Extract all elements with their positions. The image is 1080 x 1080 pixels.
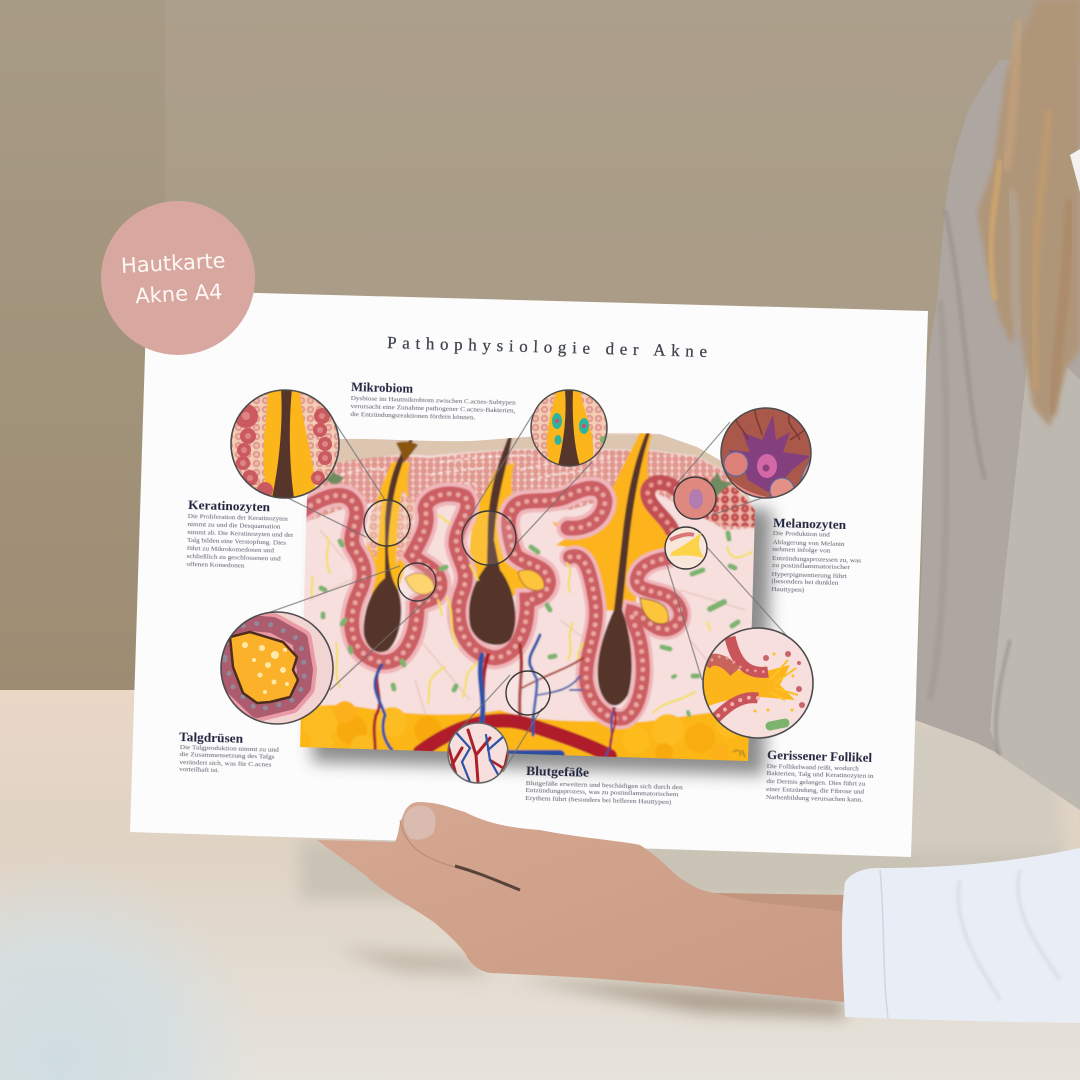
title: Pathophysiologie der Akne [387,333,707,361]
text block: Mikrobiom: Dysbiose im Hautmikrobiom zwischen C.acnes-Subtypen [351,396,516,407]
text block: Blutgefäße [525,763,683,806]
magnifier: melanocytes [720,407,812,499]
magnifier: sebaceous gland [221,612,333,724]
badge: Hautkarte Akne A4: Hautkarte [120,249,226,278]
white shirt sleeve [842,848,1080,1023]
thumbnail [404,806,436,840]
text block: Melanozyten: Die Produktion und [773,531,830,539]
stratum corneum [336,434,752,506]
text block: Talgdrüsen: vorteilhaft ist. [179,766,220,774]
text block: Melanozyten: Hauttypen) [771,586,804,594]
background: table [0,690,1080,1080]
text block: Keratinozyten: Talg bilden eine Verstopfung. Dies [187,537,287,547]
table shade right [900,720,1060,850]
text block: Talgdrüsen: Die Talgproduktion nimmt zu und [180,745,279,754]
follicle sebum fills [367,432,669,612]
text block: Blutgefäße: Blutgefäße erweitern und beschädigen sich durch den [526,780,683,791]
illustration shadow [312,470,772,775]
text block: Melanozyten [771,515,863,595]
subcutaneous fat [298,701,752,765]
table shade behind hand [300,840,1060,900]
text block: Gerissener Follikel: einer Entzündung, die Fibrose und [766,787,864,796]
text block: Keratinozyten: nimmt ab. Die Keratinozyten und der [187,530,293,539]
small lens details [670,489,704,558]
magnifier: microbiome [530,390,610,470]
hairs [362,433,650,706]
text block: Keratinozyten: offenen Komedonen [186,561,245,570]
text block: Gerissener Follikel: Die Follikelwand reißt, wodurch [767,763,859,773]
blurred foreground blob [0,860,260,1080]
text block: Melanozyten: Entzündungsprozessen zu, was [772,556,862,564]
red epidermis right [701,476,755,528]
keratinocyte walls around follicles [296,482,685,719]
deep vessels [374,635,616,756]
text block: Mikrobiom: verursacht eine Zunahme pathogener C.acnes-Bakterien, [350,404,516,415]
text block: Talgdrüsen: verändert sich, was für C.acnes [179,759,272,769]
sebaceous glands [405,570,669,624]
artist mark [733,750,745,757]
text block: Gerissener Follikel [766,747,874,804]
dermis [304,433,755,724]
text block: Blutgefäße: Blutgefäße [526,763,590,780]
melanocyte star [709,472,732,497]
text block: Gerissener Follikel: Bakterien, Talg und Keratinozyten in [766,771,874,780]
person: blouse and hair [915,0,1080,810]
text block: Talgdrüsen: die Zusammensetzung des Talgs [180,752,275,761]
background: beige wall [0,0,1080,800]
text block: Mikrobiom [350,379,517,423]
small lens circles [364,477,716,715]
keratinocyte clusters in funnels [366,490,415,565]
text block: Melanozyten: Hyperpigmentierung führt [772,571,847,580]
text block: Talgdrüsen [178,729,279,776]
hand holding poster [317,802,845,1002]
text block: Gerissener Follikel: die Dermis gelangen. Dies führt zu [766,778,865,788]
paper poster [130,290,928,857]
text block: Melanozyten: Ablagerung von Melanin [772,540,845,548]
text block: Keratinozyten: führt zu Mikrokomedonen und [187,545,274,554]
skin cross-section illustration [300,433,755,761]
magnifier: ruptured follicle [700,628,813,738]
badge: Hautkarte Akne A4: Akne A4 [135,280,223,308]
text block: Melanozyten: nehmen infolge von [772,546,830,555]
shadow of hand on table [335,948,845,1018]
text block: Melanozyten: zu postinflammatorischer [772,562,850,571]
epidermis [296,449,757,530]
text block: Keratinozyten: Keratinozyten [188,497,271,514]
connector lines [262,414,795,772]
text block: Melanozyten: (besonders bei dunklen [771,578,839,587]
text block: Mikrobiom: Mikrobiom [351,379,413,396]
text block: Blutgefäße: Entzündungsprozess, was zu postinflammatorischem [525,787,679,798]
text block: Mikrobiom: die Entzündungsreaktionen fördern können. [350,411,476,421]
text block: Melanozyten: Melanozyten [773,515,847,532]
text block: Keratinozyten: nimmt zu und die Desquamation [187,522,281,531]
text block: Keratinozyten: schließlich zu geschlossenen und [187,553,281,563]
text block: Keratinozyten: Die Proliferation der Keratinozyten [188,513,288,523]
badge: Hautkarte Akne A4 [101,201,255,355]
bacteria [321,533,738,715]
wall panel left [0,0,165,700]
magnifier: keratinocytes [230,388,340,498]
elastin fibres [311,515,752,713]
text block: Gerissener Follikel: Narbenbildung verursachen kann. [766,795,864,804]
text block: Blutgefäße: Erythem führt (besonders bei helleren Hauttypen) [525,795,671,806]
epidermis lace highlights [340,455,610,490]
star left [326,472,344,486]
text block: Talgdrüsen: Talgdrüsen [179,729,244,746]
text block: Keratinozyten [186,497,294,571]
text block: Gerissener Follikel: Gerissener Follikel [767,747,873,765]
magnifier: blood vessels [448,723,510,783]
